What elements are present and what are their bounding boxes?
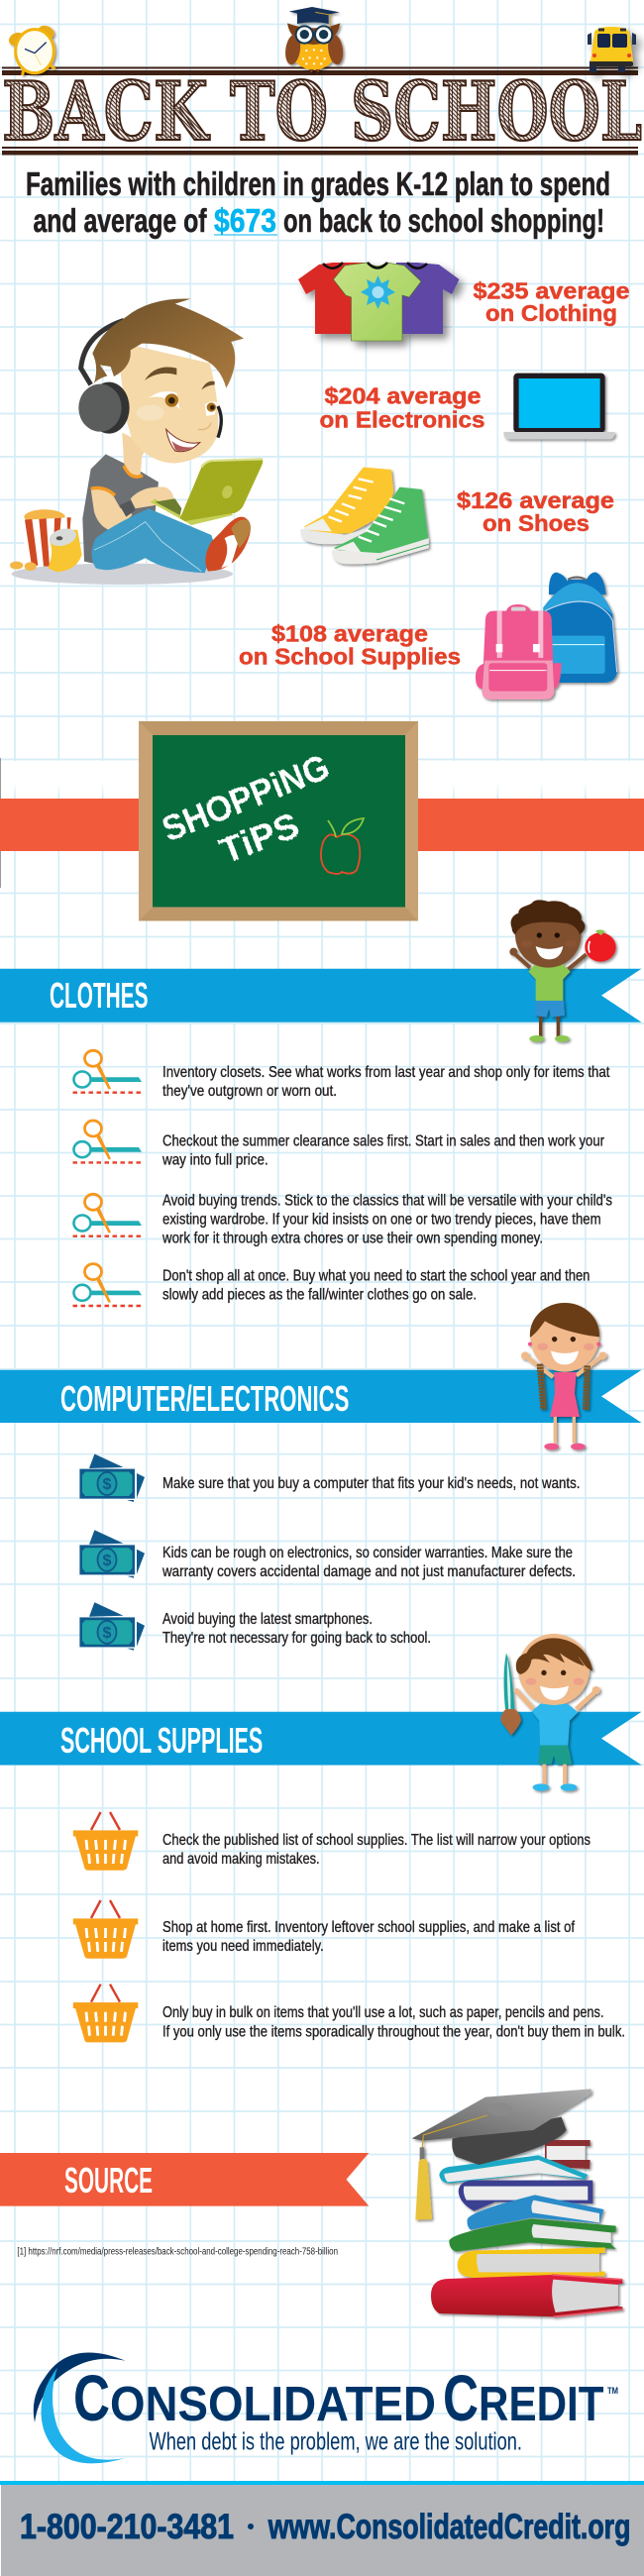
- tip 3: work for it through extra chores or use their own spending money.: [161, 1231, 543, 1247]
- stat: school supplies: on School Supplies: [239, 644, 461, 670]
- icon: money 1: $: [103, 1476, 112, 1493]
- illustration: boy with laptop: [10, 299, 263, 585]
- tip 1: [162, 1064, 610, 1100]
- tip 2: way into full price.: [161, 1152, 268, 1169]
- tips: school supplies: [73, 1812, 625, 2042]
- stat: electronics: [319, 382, 485, 432]
- blue book: [467, 2195, 603, 2230]
- header: top rules: [2, 67, 638, 75]
- tip 2: [161, 1133, 605, 1169]
- band: shopping tips stripe: [0, 799, 644, 851]
- chalk heading: SHOPPiNG: [157, 746, 335, 849]
- icon: backpacks: [476, 573, 617, 699]
- ribbon: school supplies: SCHOOL SUPPLIES: [60, 1720, 263, 1761]
- ground shadow: [12, 564, 233, 585]
- crushed can: [48, 526, 82, 572]
- tip 1: and avoid making mistakes.: [162, 1851, 320, 1868]
- footer: [0, 2481, 644, 2576]
- icon: chalk apple: [321, 818, 364, 874]
- icon: basket 1: [73, 1812, 138, 1871]
- title: TO: [230, 65, 328, 160]
- stat: clothing: on Clothing: [485, 300, 617, 326]
- tip 3: [162, 1611, 431, 1647]
- headphone cup: [88, 382, 130, 434]
- icon: scissors 4: [73, 1264, 144, 1306]
- stat: electronics: on Electronics: [319, 406, 485, 432]
- tip 2: [161, 1545, 576, 1580]
- tip 4: slowly add pieces as the fall/winter clothes go on sale.: [162, 1287, 477, 1304]
- logo wordmark: C: [443, 2361, 479, 2434]
- neck: [122, 433, 149, 476]
- arm: [91, 488, 132, 532]
- source citation: [1] https://nrf.com/media/press-releases/back-school-and-college-spending-reach-758-billion: [17, 2247, 338, 2257]
- stat: shoes: on Shoes: [483, 510, 590, 536]
- ribbon: computer/electronics: [0, 1370, 642, 1423]
- character: boy with paintbrush: [500, 1634, 600, 1791]
- head: [121, 345, 218, 464]
- stat: electronics: $204 average: [325, 382, 482, 408]
- shoe: [205, 517, 251, 572]
- maroon book: [545, 2140, 590, 2169]
- tip 3: Avoid buying the latest smartphones.: [162, 1611, 373, 1628]
- icon: sneakers: [300, 468, 429, 564]
- tip 1: [162, 1832, 590, 1868]
- hair: [92, 299, 244, 388]
- icon: money 3: [79, 1602, 145, 1651]
- headband: [81, 320, 124, 384]
- icon: basket 2: [73, 1900, 138, 1959]
- teal book: [439, 2155, 588, 2184]
- pink backpack: [476, 604, 562, 699]
- logo wordmark: ONSOLIDATED: [110, 2378, 436, 2431]
- yellow book: [458, 2247, 605, 2278]
- ribbon: clothes: [0, 969, 642, 1022]
- icon: scissors 3: [73, 1194, 144, 1236]
- icon: scissors 2: [73, 1121, 144, 1162]
- tip 3: [161, 1193, 612, 1247]
- logo: Consolidated Credit: [34, 2352, 618, 2463]
- stat: school supplies: $108 average: [271, 620, 428, 646]
- blue backpack: [543, 573, 617, 683]
- tips: clothes: [73, 1050, 612, 1306]
- tip 2: items you need immediately.: [162, 1938, 324, 1955]
- icon: money 2: $: [103, 1553, 112, 1569]
- red book: [431, 2275, 622, 2316]
- icon: school bus: [588, 27, 636, 72]
- tip 2: warranty covers accidental damage and not just manufacturer defects.: [161, 1563, 576, 1580]
- logo wordmark: REDIT: [479, 2378, 604, 2431]
- headline: [26, 165, 610, 239]
- ribbon: clothes: CLOTHES: [50, 975, 149, 1016]
- logo swoosh: [34, 2352, 125, 2463]
- legs: [91, 508, 215, 573]
- stat: school supplies: [239, 620, 461, 670]
- icon: owl with graduation cap: [283, 7, 345, 72]
- tip 4: [162, 1268, 590, 1304]
- tips: computer/electronics: [79, 1454, 580, 1651]
- icon: basket 3: [73, 1985, 138, 2042]
- tip 2: [162, 1919, 575, 1955]
- shirt and back: [82, 454, 159, 565]
- logo wordmark: [73, 2361, 618, 2434]
- popcorn: [10, 509, 71, 571]
- icon: alarm clock: [7, 23, 56, 75]
- icon: money 1: [79, 1454, 145, 1502]
- logo wordmark: C: [73, 2361, 110, 2434]
- header: bottom rules: [2, 147, 638, 155]
- ribbon: source: SOURCE: [64, 2160, 153, 2200]
- icon: money 3: $: [103, 1625, 112, 1642]
- icon: laptop: [503, 374, 615, 439]
- tip 1: they've outgrown or worn out.: [162, 1083, 337, 1100]
- paintbrush: [500, 1653, 521, 1736]
- headline: $673: [214, 202, 276, 239]
- footer bullet: [248, 2523, 254, 2529]
- ribbon: computer/electronics: COMPUTER/ELECTRONICS: [60, 1378, 349, 1419]
- character: boy with apple: [509, 900, 616, 1042]
- tip 3: They're not necessary for going back to school.: [162, 1630, 431, 1647]
- stat: clothing: [474, 277, 630, 326]
- illustration: books and graduation cap: [412, 2089, 622, 2316]
- laptop: [151, 459, 263, 525]
- stat: shoes: $126 average: [457, 487, 614, 513]
- ribbon: school supplies: [0, 1712, 642, 1766]
- navy book: [459, 2181, 592, 2211]
- graduation cap: [412, 2089, 591, 2220]
- character: girl: [521, 1303, 606, 1449]
- green book: [449, 2218, 616, 2252]
- icon: money 2: [79, 1530, 145, 1578]
- icon: scissors 1: [73, 1050, 144, 1093]
- tip 3: [162, 2004, 625, 2041]
- footer phone: 1-800-210-3481: [20, 2508, 234, 2546]
- headline: and average of: [34, 202, 207, 239]
- stat: clothing: $235 average: [474, 277, 630, 303]
- face: [137, 368, 217, 452]
- panel: chalkboard: [139, 721, 418, 921]
- ribbon: source: [0, 2153, 369, 2206]
- logo wordmark: TM: [607, 2386, 618, 2396]
- title: [2, 65, 642, 160]
- stat: shoes: [457, 487, 614, 536]
- title: BACK: [2, 65, 210, 160]
- chalk heading: TiPS: [214, 805, 304, 871]
- icon: t-shirts: [298, 263, 460, 341]
